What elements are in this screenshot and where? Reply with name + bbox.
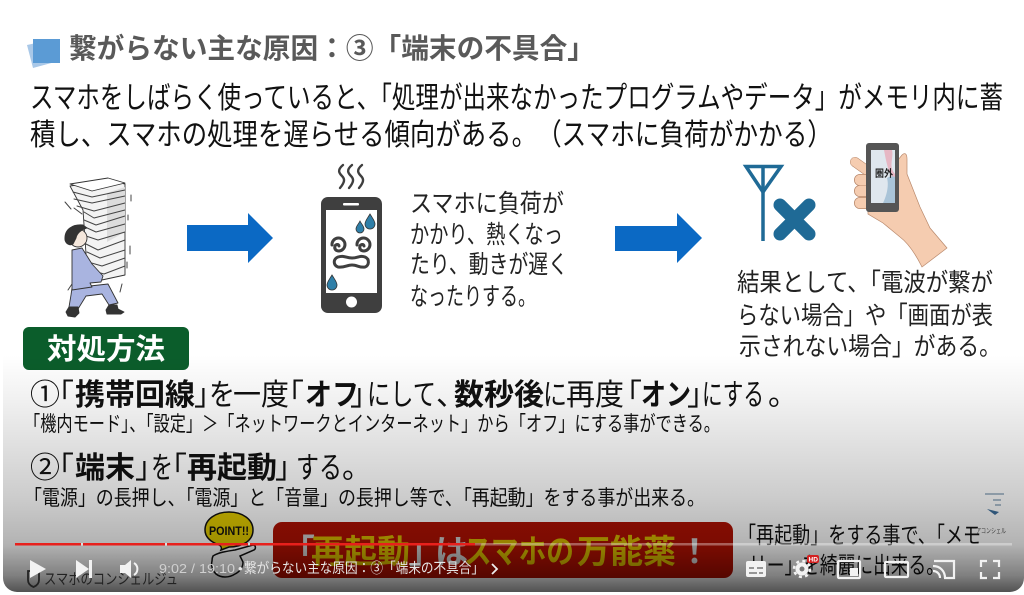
step 2: 」 bbox=[275, 452, 305, 485]
step 2: を bbox=[151, 452, 173, 485]
text: phone under load: スマホに負荷が bbox=[410, 190, 564, 218]
step 1: 「 bbox=[274, 379, 304, 412]
step 1: ① bbox=[30, 379, 60, 412]
step 1: 再度 bbox=[566, 379, 624, 412]
step 1: 」 bbox=[194, 379, 224, 412]
step 1: にして bbox=[367, 379, 436, 412]
step 1 bbox=[24, 379, 798, 436]
step 2 bbox=[24, 452, 705, 510]
title icon: blue square bbox=[27, 39, 60, 68]
video time and chapter: • bbox=[238, 561, 243, 576]
banner: reboot is the cure-all: 再起動 bbox=[311, 533, 410, 570]
heading badge: countermeasures bbox=[23, 327, 189, 370]
player controls left bbox=[30, 560, 137, 578]
step 2: 再起動 bbox=[187, 452, 277, 485]
intro text bbox=[30, 82, 1003, 152]
illustration: hand holding phone showing no signal: 圏外 bbox=[875, 167, 893, 180]
step 1: 携帯回線 bbox=[75, 379, 195, 412]
illustration: overloaded man carrying papers bbox=[65, 178, 131, 317]
text: phone under load bbox=[410, 190, 568, 311]
step 1: 。 bbox=[768, 379, 798, 412]
side text: reboot clears memory: リー」を綺麗に出来る。 bbox=[749, 552, 944, 578]
banner: reboot is the cure-all: 」 bbox=[409, 533, 442, 570]
heading badge: countermeasures: 対処方法 bbox=[47, 333, 165, 366]
icon: antenna with cross bbox=[746, 166, 809, 241]
step 1: オン bbox=[641, 379, 691, 412]
text: phone under load: なったりする。 bbox=[410, 283, 536, 311]
banner: reboot is the cure-all bbox=[273, 522, 733, 578]
step 2: する bbox=[296, 452, 342, 485]
text: result: 結果として、「電波が繋が bbox=[737, 269, 993, 297]
video time and chapter: 繋がらない主な原因：③「端末の不具合」 bbox=[244, 560, 484, 576]
text: phone under load: たり、動きが遅く bbox=[410, 251, 568, 279]
point bubble with pointing hand: POINT!! bbox=[209, 524, 249, 538]
point bubble with pointing hand bbox=[205, 512, 255, 577]
text: phone under load: かかり、熱くなっ bbox=[410, 221, 563, 249]
intro text: （スマホに負荷がかかる） bbox=[537, 119, 832, 152]
step 2: 「電源」の長押し、「電源」と「音量」の長押し等で、「再起動」をする事が出来る。 bbox=[24, 487, 705, 510]
title: 繋がらない主な原因：③「端末の不具合」 bbox=[69, 32, 595, 64]
icon: overheating phone bbox=[321, 165, 382, 313]
banner: reboot is the cure-all: ！ bbox=[678, 533, 711, 570]
text: result bbox=[737, 269, 1001, 361]
step 2: 」 bbox=[135, 452, 165, 485]
illustration: hand holding phone showing no signal bbox=[855, 143, 947, 267]
step 2: 。 bbox=[342, 452, 372, 485]
corner logo bbox=[976, 494, 1006, 535]
HD badge bbox=[807, 555, 819, 564]
corner logo: アコンシェル bbox=[976, 527, 1006, 535]
white page corners bbox=[0, 355, 3, 595]
step 1: にする bbox=[702, 379, 764, 412]
step 1: 「 bbox=[612, 379, 642, 412]
step 1: 」 bbox=[687, 379, 717, 412]
step 1: を bbox=[209, 379, 235, 412]
player controls right bbox=[746, 561, 999, 578]
video progress bar bbox=[15, 543, 1012, 546]
step 1: に bbox=[543, 379, 567, 412]
banner: reboot is the cure-all: 「 bbox=[282, 533, 315, 570]
step 1: 一度 bbox=[233, 379, 289, 412]
intro text: 積し、スマホの処理を遅らせる傾向がある。 bbox=[30, 119, 537, 152]
banner: reboot is the cure-all: スマホの bbox=[464, 533, 574, 570]
step 2: ② bbox=[30, 452, 60, 485]
step 1: 数秒後 bbox=[454, 379, 544, 412]
step 1: 「 bbox=[44, 379, 74, 412]
bottom gradient overlay bbox=[3, 355, 1024, 592]
step 2: 端末 bbox=[75, 452, 135, 485]
HD badge: HD bbox=[808, 556, 818, 564]
side text: reboot clears memory bbox=[738, 522, 981, 578]
step 1: 」 bbox=[350, 379, 380, 412]
step 2: 「 bbox=[44, 452, 74, 485]
arrow 2 bbox=[615, 213, 702, 263]
step 1: 「機内モード」、「設定」＞「ネットワークとインターネット」から「オフ」にする事ができる。 bbox=[24, 413, 720, 436]
step 1: オフ bbox=[305, 379, 359, 412]
banner: reboot is the cure-all: は bbox=[435, 533, 468, 570]
step 1: 、 bbox=[436, 379, 466, 412]
channel name: スマホのコンシェルジュ bbox=[44, 571, 178, 588]
arrow 1 bbox=[187, 213, 273, 263]
video time and chapter: 9:02 / 19:10 bbox=[159, 561, 235, 576]
step 2: 「 bbox=[157, 452, 187, 485]
banner: reboot is the cure-all: 万能薬 bbox=[577, 533, 676, 570]
